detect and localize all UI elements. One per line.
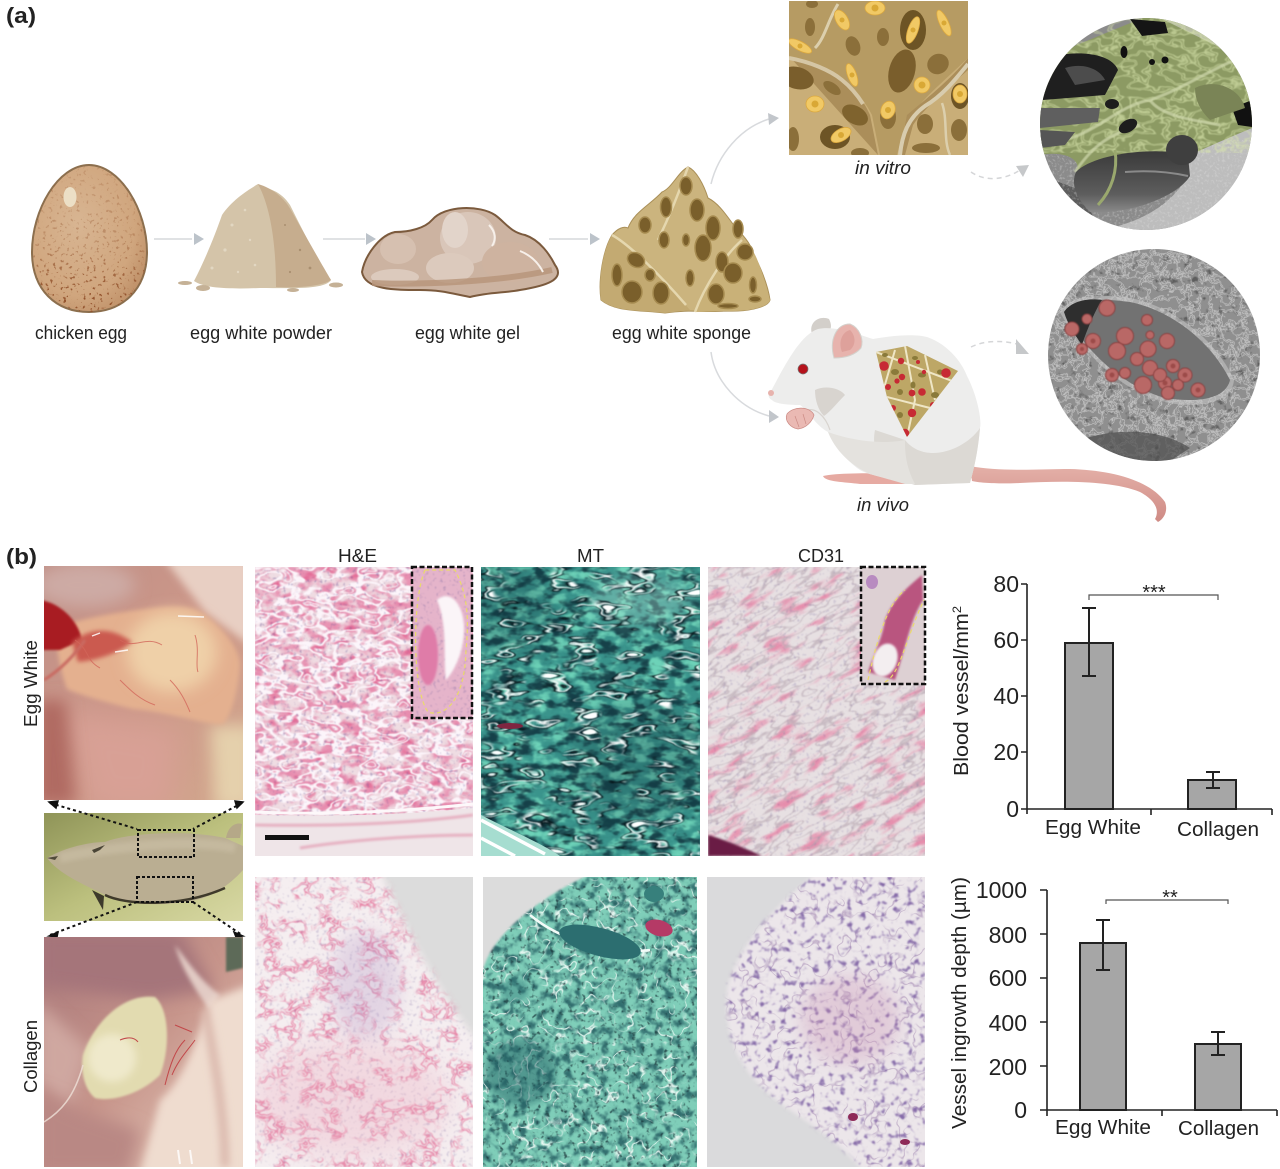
y ticks: 800 <box>989 922 1027 948</box>
bar: collagen <box>1195 1044 1241 1110</box>
body <box>769 328 980 485</box>
inset <box>412 567 472 718</box>
y ticks: 1000 <box>976 877 1027 903</box>
y ticks: 400 <box>989 1010 1027 1036</box>
axes <box>1040 890 1277 1116</box>
far ear <box>811 318 831 334</box>
axes <box>1021 584 1272 815</box>
illustration: mouse with implanted sponge <box>768 318 1166 522</box>
micrograph: CD31 egg white with inset <box>708 566 926 856</box>
label: egg white gel: egg white gel <box>415 323 520 343</box>
stars: ** <box>1162 887 1178 909</box>
label: egg white powder: egg white powder <box>190 323 332 343</box>
micrograph: H&E collagen <box>250 877 473 1167</box>
label: in vivo: in vivo <box>857 495 909 515</box>
y ticks <box>993 571 1019 822</box>
bar: egg white <box>1065 643 1113 809</box>
y ticks: 80 <box>993 571 1019 597</box>
implant <box>876 346 958 437</box>
stars: *** <box>1142 582 1166 604</box>
image: SEM of red blood cells in vessel <box>1048 249 1260 461</box>
micrograph: CD31 collagen <box>707 877 925 1167</box>
image: SEM of cells on sponge <box>1040 15 1252 230</box>
label: chicken egg: chicken egg <box>35 323 127 343</box>
significance bracket <box>1089 595 1218 600</box>
error bars <box>1082 608 1220 788</box>
photo: mouse with implant boxes <box>44 801 243 937</box>
row label: Collagen: Collagen <box>21 1020 41 1093</box>
bar chart: blood vessel density <box>950 571 1272 841</box>
column heading: H&E: H&E <box>338 546 377 566</box>
arrow: egg to powder <box>154 233 204 245</box>
y ticks <box>976 877 1027 1123</box>
arrow: sponge to in vitro <box>711 113 779 184</box>
eye <box>798 364 808 374</box>
tail <box>970 466 1166 522</box>
scale bar <box>265 835 309 840</box>
inset <box>861 567 925 684</box>
y ticks: 40 <box>993 683 1019 709</box>
photo: collagen implant <box>44 937 243 1167</box>
bar chart: blood vessel density: Collagen <box>1177 819 1259 841</box>
row label: Egg White: Egg White <box>21 640 41 727</box>
bar chart: vessel ingrowth depth: Collagen <box>1178 1118 1259 1140</box>
y axis label: Vessel ingrowth depth (µm) <box>949 877 971 1129</box>
bar chart: vessel ingrowth depth <box>949 877 1277 1140</box>
bar: collagen <box>1188 780 1236 809</box>
y ticks: 0 <box>1006 796 1019 822</box>
arrow: sponge to in vivo <box>711 352 779 423</box>
label: egg white sponge: egg white sponge <box>612 323 751 343</box>
illustration: in vitro sponge with cells <box>778 0 969 158</box>
column heading: MT: MT <box>577 546 604 566</box>
panel label: b: (b) <box>6 544 37 569</box>
foot <box>823 472 912 484</box>
paw <box>786 408 814 429</box>
label: in vitro: in vitro <box>855 158 911 178</box>
y axis label: 2 <box>950 606 964 613</box>
panel label: a: (a) <box>6 3 36 28</box>
y ticks: 60 <box>993 627 1019 653</box>
arrow: gel to sponge <box>549 233 600 245</box>
icon: egg white powder <box>178 184 343 292</box>
micrograph: MT egg white <box>481 567 700 856</box>
arrow: in vivo to SEM <box>971 339 1029 354</box>
icon: chicken egg <box>30 165 150 315</box>
arrow: powder to gel <box>323 233 376 245</box>
y ticks: 20 <box>993 739 1019 765</box>
photo: egg white implant <box>44 566 243 800</box>
y ticks: 0 <box>1014 1097 1027 1123</box>
category labels: Egg White <box>1045 817 1141 839</box>
category labels: Egg White <box>1055 1117 1151 1139</box>
micrograph: MT collagen <box>483 877 697 1167</box>
bar: egg white <box>1080 943 1126 1110</box>
arrow: in vitro to SEM <box>971 165 1029 179</box>
y ticks: 600 <box>989 965 1027 991</box>
near ear <box>832 324 862 358</box>
y axis label: Blood vessel/mm <box>951 624 973 776</box>
icon: egg white gel <box>362 208 558 297</box>
icon: egg white sponge <box>600 167 770 313</box>
y ticks: 200 <box>989 1054 1027 1080</box>
significance bracket <box>1106 900 1228 904</box>
micrograph: H&E egg white with inset <box>255 567 473 856</box>
column heading: CD31: CD31 <box>798 546 844 566</box>
error bars <box>1096 920 1225 1055</box>
